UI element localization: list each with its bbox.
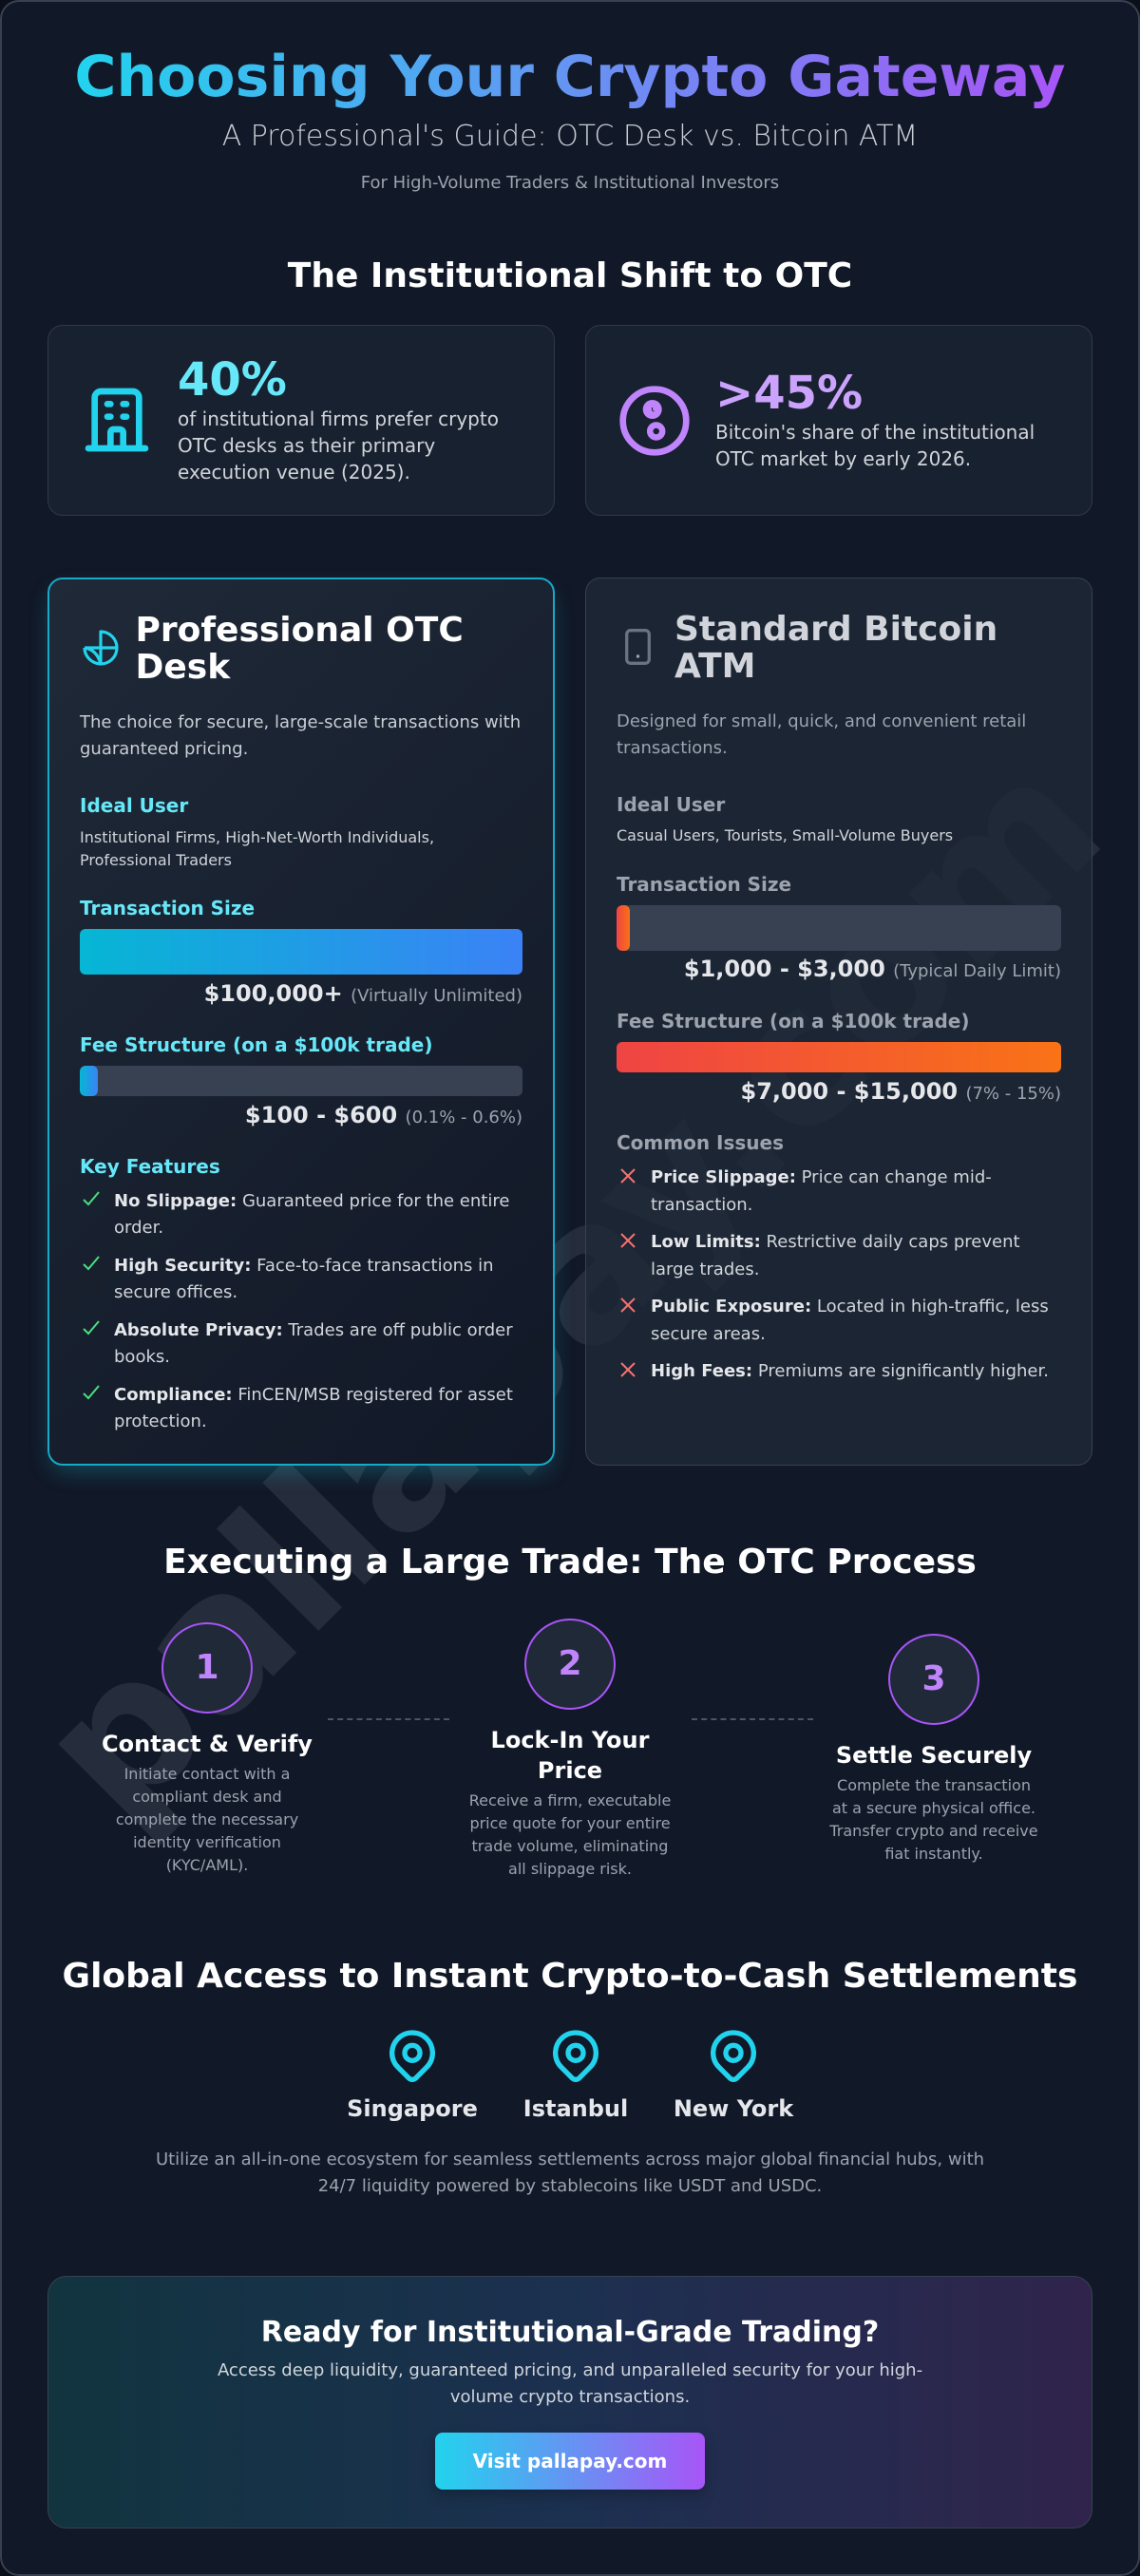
icon: pin [711, 2030, 756, 2082]
icon: pin [390, 2030, 435, 2082]
step 1 text: Initiate contact with a [124, 1765, 290, 1783]
panel: stat 40% [48, 325, 555, 516]
feature: no slippage [83, 1191, 509, 1238]
value: transaction size: $1,000 - $3,000 (Typical Daily Limit) [684, 956, 1061, 982]
value: fee structure: $100 - $600 (0.1% - 0.6%) [245, 1102, 522, 1128]
card description [80, 712, 521, 758]
feature: compliance [83, 1385, 513, 1431]
step 1 number [162, 1622, 253, 1714]
step 2 text: trade volume, eliminating [472, 1837, 668, 1855]
step 3 number [888, 1634, 979, 1725]
step 1 [102, 1622, 313, 1874]
location: Singapore [347, 2030, 478, 2122]
feature: absolute privacy: Absolute Privacy: Trades are off public order [114, 1320, 513, 1339]
heading: global access: Global Access to Instant Crypto-to-Cash Settlements [63, 1957, 1077, 1996]
CTA text: volume crypto transactions. [450, 2387, 690, 2407]
bar: fee structure [80, 1066, 522, 1096]
CTA text [218, 2360, 922, 2407]
subtitle: A Professional's Guide: OTC Desk vs. Bitcoin ATM [222, 120, 918, 153]
icon: coin [619, 386, 690, 456]
stat description: OTC desks as their primary [178, 433, 435, 456]
value: fee structure: $7,000 - $15,000 (7% - 15%) [741, 1078, 1061, 1105]
feature: no slippage: order. [114, 1218, 163, 1238]
panel: standard bitcoin ATM [585, 578, 1092, 1466]
label: fee structure: Fee Structure (on a $100k trade) [617, 1010, 969, 1032]
card description [617, 710, 1026, 758]
step 1 text: identity verification [133, 1833, 281, 1851]
card description: guaranteed pricing. [80, 739, 248, 758]
issue: price slippage [620, 1167, 992, 1215]
step 2 number [524, 1619, 616, 1710]
step 1 text: complete the necessary [116, 1810, 298, 1828]
value: transaction size: $100,000+ (Virtually Unlimited) [204, 980, 522, 1007]
label: transaction size: Transaction Size [80, 897, 255, 919]
stat value: 40% [178, 353, 287, 407]
panel: professional OTC desk [48, 578, 555, 1466]
icon: building [86, 388, 148, 452]
step 3 text: Transfer crypto and receive [829, 1822, 1038, 1840]
card description: The choice for secure, large-scale transactions with [80, 712, 521, 731]
step 3 text: at a secure physical office. [832, 1799, 1036, 1817]
feature: high security [83, 1256, 494, 1302]
feature: no slippage: No Slippage: Guaranteed price for the entire [114, 1191, 509, 1210]
city name: Singapore [347, 2095, 478, 2122]
icon: pin [553, 2030, 598, 2082]
step 1 text: (KYC/AML). [166, 1856, 248, 1874]
ideal user text: Institutional Firms, High-Net-Worth Individuals, [80, 828, 434, 846]
stat description [178, 407, 499, 483]
feature: high security: High Security: Face-to-face transactions in [114, 1256, 494, 1275]
issue: price slippage: Price Slippage: Price can change mid- [651, 1167, 992, 1187]
card title: Standard Bitcoin [674, 610, 998, 648]
feature list [83, 1191, 513, 1431]
step 2 text [469, 1791, 671, 1878]
bar: transaction size [80, 929, 522, 975]
issue list [620, 1167, 1049, 1381]
label: common issues: Common Issues [617, 1131, 784, 1154]
label: ideal user: Ideal User [617, 793, 725, 816]
step 2 number: 2 [558, 1644, 582, 1683]
issue: low limits: Low Limits: Restrictive daily caps prevent [651, 1232, 1020, 1252]
step 3 number: 3 [922, 1659, 946, 1698]
card title: Professional OTC [135, 610, 464, 650]
icon: pie [83, 630, 119, 666]
step 2 title [491, 1727, 650, 1784]
CTA button [435, 2433, 705, 2490]
issue: public exposure: Public Exposure: Located in high-traffic, less [651, 1297, 1049, 1316]
step 2 [469, 1619, 671, 1878]
step 2 title: Price [538, 1757, 602, 1784]
stat description: OTC market by early 2026. [715, 446, 971, 469]
location: New York [674, 2030, 794, 2122]
card description: Designed for small, quick, and convenient retail [617, 710, 1026, 731]
issue: price slippage: transaction. [651, 1195, 752, 1215]
label: key features: Key Features [80, 1155, 220, 1178]
panel: call to action [48, 2276, 1092, 2529]
issue: public exposure [620, 1297, 1049, 1344]
tagline: For High-Volume Traders & Institutional Investors [361, 173, 779, 193]
CTA heading: Ready for Institutional-Grade Trading? [261, 2316, 879, 2348]
step 1 text [116, 1765, 298, 1874]
stat description: of institutional firms prefer crypto [178, 407, 499, 429]
label: fee structure: Fee Structure (on a $100k trade) [80, 1033, 432, 1056]
connector 2 [692, 1718, 813, 1720]
issue: low limits [620, 1232, 1020, 1279]
ideal user text [80, 828, 434, 869]
card title: ATM [674, 647, 755, 686]
step 3 text [829, 1776, 1038, 1863]
feature: compliance: protection. [114, 1411, 207, 1431]
ideal user text: Professional Traders [80, 851, 232, 869]
card title: Desk [135, 648, 230, 687]
step 3 text: Complete the transaction [837, 1776, 1031, 1794]
heading: institutional shift: The Institutional Shift to OTC [288, 256, 852, 295]
location: Istanbul [523, 2030, 628, 2122]
heading: OTC process: Executing a Large Trade: The OTC Process [163, 1543, 977, 1582]
stat description: Bitcoin's share of the institutional [715, 420, 1035, 443]
bar: transaction size [617, 905, 1061, 951]
global access text [156, 2150, 984, 2196]
issue: public exposure: secure areas. [651, 1324, 766, 1344]
card title [135, 610, 464, 687]
step 3 text: fiat instantly. [884, 1845, 983, 1863]
step 1 number: 1 [195, 1648, 219, 1687]
step 2 text: all slippage risk. [508, 1860, 632, 1878]
step 2 text: price quote for your entire [469, 1814, 671, 1832]
CTA button: Visit pallapay.com [473, 2450, 667, 2472]
panel: stat 45% [585, 325, 1092, 516]
icon: phone [625, 629, 651, 665]
title: Choosing Your Crypto Gateway [74, 44, 1066, 110]
feature: high security: secure offices. [114, 1282, 238, 1302]
issue: low limits: large trades. [651, 1260, 759, 1279]
step 2 text: Receive a firm, executable [469, 1791, 671, 1809]
stat description: execution venue (2025). [178, 460, 410, 483]
CTA text: Access deep liquidity, guaranteed pricing, and unparalleled security for your high- [218, 2360, 922, 2380]
step 1 text: compliant desk and [132, 1788, 282, 1806]
step 2 title: Lock-In Your [491, 1727, 649, 1753]
feature: compliance: Compliance: FinCEN/MSB registered for asset [114, 1385, 513, 1404]
ideal user text: Casual Users, Tourists, Small-Volume Buyers [617, 826, 953, 844]
label: transaction size: Transaction Size [617, 873, 791, 896]
bar: fee structure [617, 1042, 1061, 1072]
step 1 title: Contact & Verify [102, 1731, 313, 1757]
stat value: >45% [715, 367, 863, 420]
global access text: Utilize an all-in-one ecosystem for seamless settlements across major global financial hubs, with [156, 2150, 984, 2169]
issue: high fees: High Fees: Premiums are significantly higher. [651, 1361, 1049, 1381]
step 3 title: Settle Securely [836, 1742, 1032, 1769]
city name: Istanbul [523, 2095, 628, 2122]
city name: New York [674, 2095, 793, 2122]
feature: absolute privacy [83, 1320, 513, 1367]
global access text: 24/7 liquidity powered by stablecoins like USDT and USDC. [318, 2176, 822, 2196]
feature: absolute privacy: books. [114, 1347, 170, 1367]
card description: transactions. [617, 737, 728, 758]
label: ideal user: Ideal User [80, 794, 188, 817]
card title [674, 610, 998, 686]
connector 1 [328, 1718, 449, 1720]
watermark: pallapay.com [0, 714, 1140, 1861]
stat description [715, 420, 1035, 469]
step 3 [829, 1634, 1038, 1863]
